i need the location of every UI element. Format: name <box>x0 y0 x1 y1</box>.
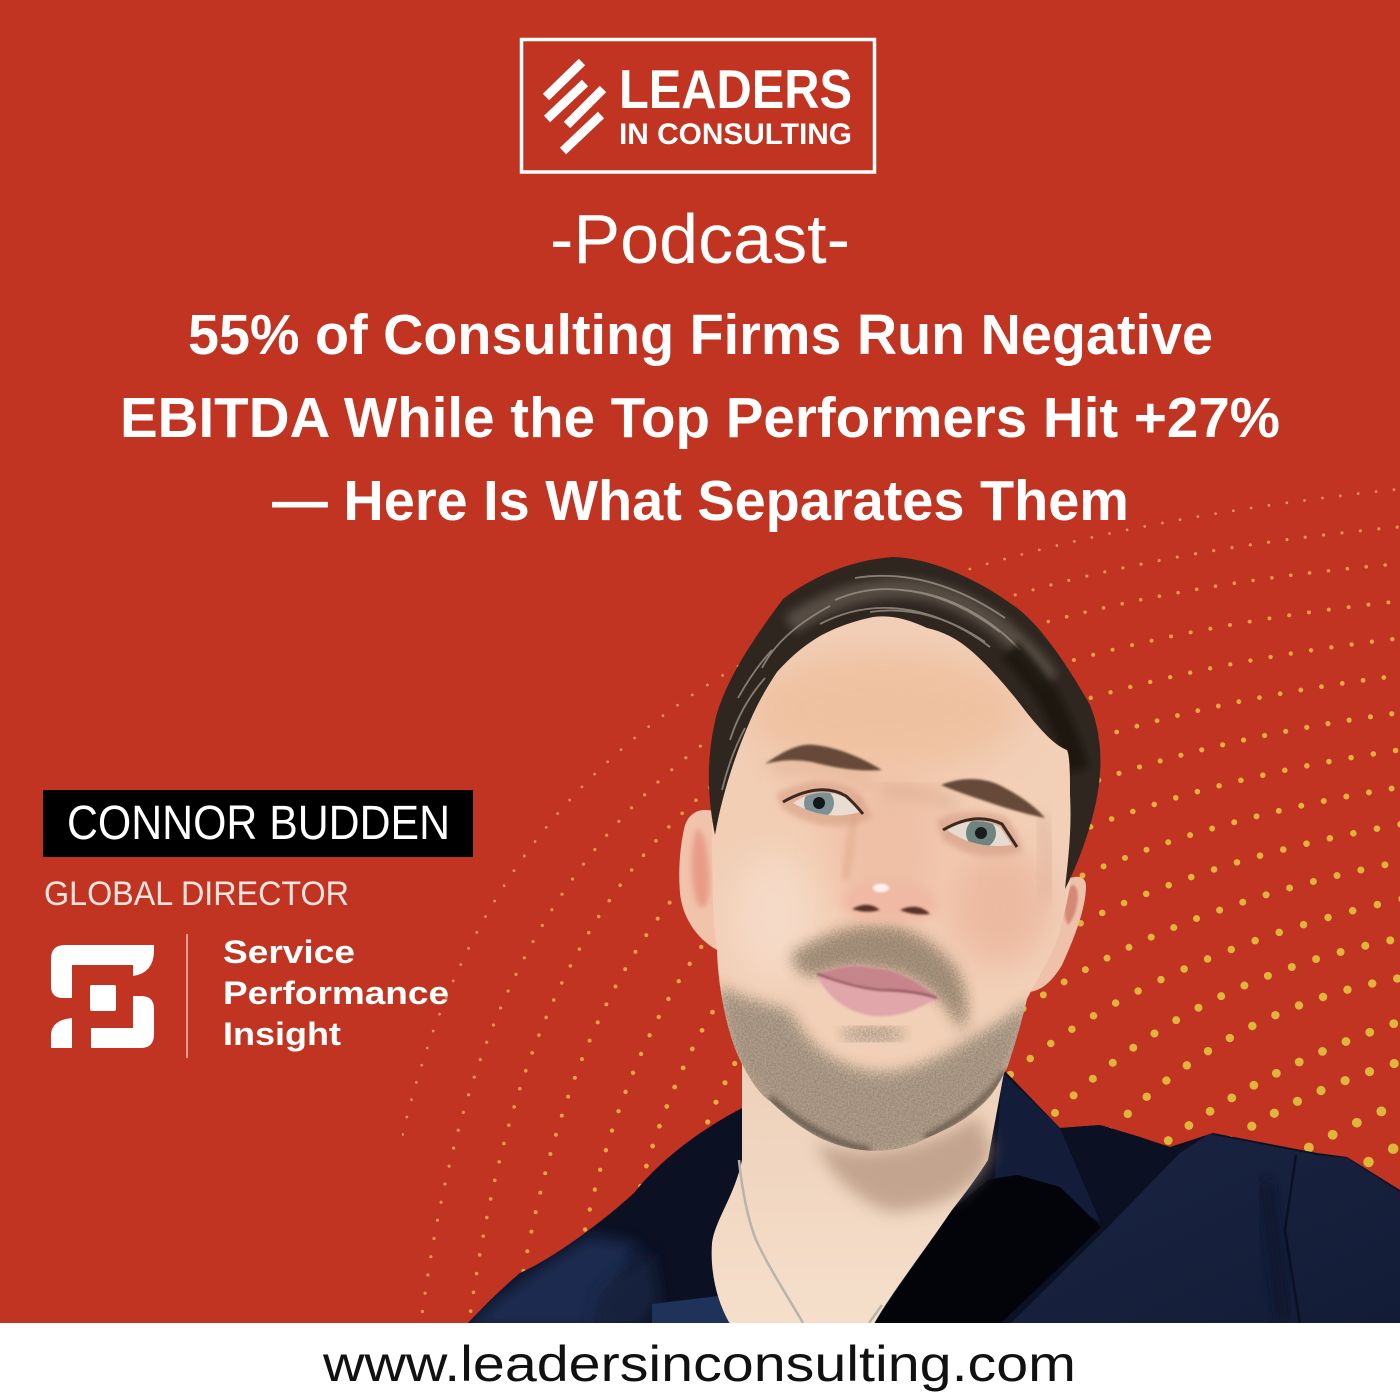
neck and chest <box>712 1060 1005 1324</box>
headline: EBITDA While the Top Performers Hit +27% <box>120 386 1280 450</box>
logo wordmark <box>619 58 852 151</box>
ear right <box>1030 877 1086 992</box>
guest name tag: CONNOR BUDDEN <box>67 797 450 850</box>
company logo: Service Performance Insight <box>51 934 449 1058</box>
eye right <box>936 811 1022 856</box>
icon: SPI mark <box>51 945 154 1048</box>
website url: www.leadersinconsulting.com <box>322 1336 1076 1392</box>
nose <box>843 879 938 920</box>
shirt <box>460 1068 1400 1330</box>
beard <box>718 927 1030 1156</box>
necklace <box>739 1160 882 1323</box>
eye left <box>776 781 872 826</box>
face shading <box>730 650 1050 980</box>
logo wordmark: LEADERS <box>619 58 852 120</box>
company name: Insight <box>223 1016 341 1052</box>
footer strip <box>0 1323 1400 1400</box>
headline <box>120 303 1280 533</box>
portrait of guest <box>460 557 1400 1330</box>
icon: logo bars <box>546 62 603 151</box>
guest title: GLOBAL DIRECTOR <box>44 875 349 913</box>
eyebrows <box>765 745 1045 818</box>
hair <box>709 557 1100 889</box>
mouth <box>817 966 937 1016</box>
logo wordmark: IN CONSULTING <box>619 118 852 151</box>
face shading and beard <box>718 650 1050 1156</box>
company name: Service <box>223 934 355 970</box>
podcast label: -Podcast- <box>550 200 850 278</box>
logo: Leaders in Consulting <box>522 40 874 172</box>
company name <box>223 934 449 1052</box>
ear left <box>679 810 725 950</box>
headline: 55% of Consulting Firms Run Negative <box>188 303 1213 367</box>
neck shadow <box>815 1115 992 1212</box>
company name: Performance <box>223 975 449 1011</box>
headline: — Here Is What Separates Them <box>272 469 1129 533</box>
face <box>712 612 1075 1151</box>
dot pattern <box>372 487 1400 1330</box>
